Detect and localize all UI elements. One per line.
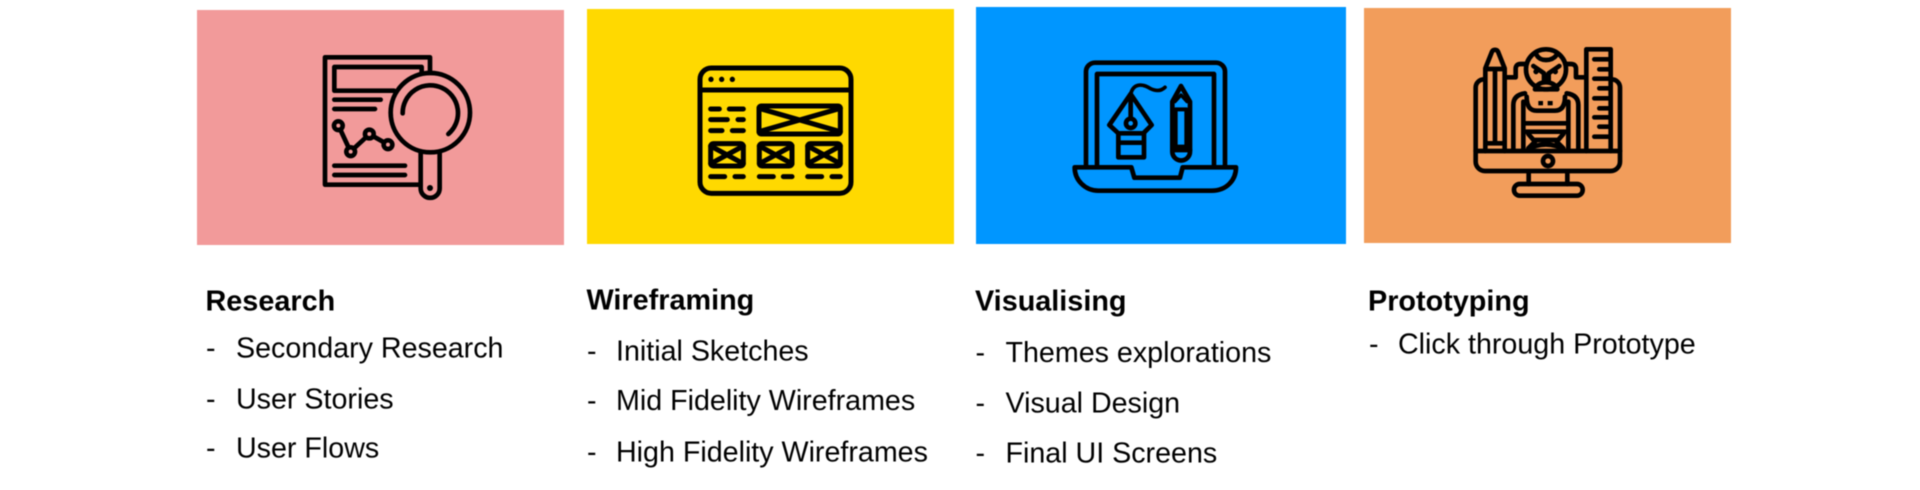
text block: visualising: Visualising — [975, 286, 1127, 318]
text block: visualising: - — [976, 388, 985, 420]
icon: monitor with robot, pencil and ruler — [1476, 49, 1620, 196]
text block: prototyping: - — [1369, 328, 1379, 360]
text block: wireframing: - — [587, 437, 597, 469]
text block: prototyping: Click through Prototype — [1398, 328, 1696, 360]
text block: research: Research — [206, 286, 335, 318]
text block: research: User Stories — [236, 383, 394, 415]
text block: research: User Flows — [236, 433, 379, 465]
text block: research: Secondary Research — [236, 332, 503, 364]
text block: wireframing — [586, 284, 928, 469]
text block: wireframing: Wireframing — [586, 284, 754, 316]
panel: wireframing — [587, 9, 954, 244]
text block: prototyping: Prototyping — [1368, 286, 1530, 318]
text block: visualising — [975, 286, 1271, 470]
text block: wireframing: High Fidelity Wireframes — [616, 437, 928, 469]
icon: wireframe browser window — [700, 68, 851, 193]
text block: visualising: - — [976, 438, 985, 470]
text block: wireframing: Mid Fidelity Wireframes — [616, 385, 915, 417]
text block: research: - — [206, 332, 216, 364]
panel: research — [197, 10, 564, 245]
text block: prototyping — [1368, 286, 1696, 360]
text block: visualising: Final UI Screens — [1006, 438, 1217, 470]
icon: report with magnifying glass — [325, 57, 470, 198]
text block: research: - — [206, 383, 216, 415]
panel: prototyping — [1364, 8, 1731, 243]
text block: visualising: Themes explorations — [1006, 337, 1271, 369]
text block: visualising: - — [976, 337, 985, 369]
text block: wireframing: - — [587, 385, 597, 417]
text block: wireframing: Initial Sketches — [616, 336, 809, 368]
panel: visualising — [976, 7, 1346, 244]
text block: research — [206, 286, 503, 465]
icon: laptop with pen nib and pencil — [1075, 63, 1236, 191]
text block: visualising: Visual Design — [1006, 388, 1180, 420]
text block: research: - — [206, 433, 216, 465]
text block: wireframing: - — [587, 336, 597, 368]
